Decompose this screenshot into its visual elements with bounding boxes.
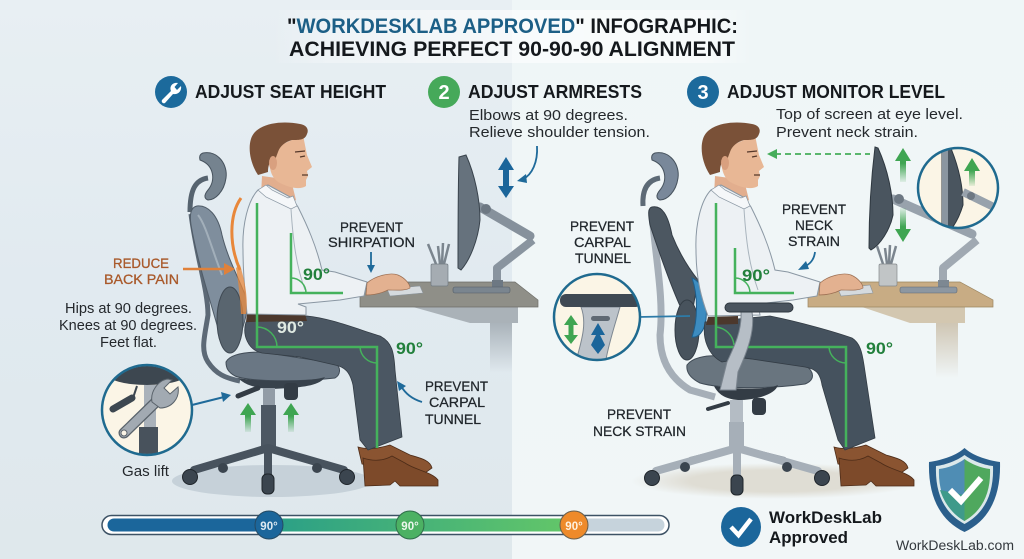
callout: prevent carpal tunnel: TUNNEL [425, 411, 481, 427]
right angle labels: 90° [866, 339, 893, 358]
callout: prevent shirpation [328, 219, 415, 273]
label: gas lift: Gas lift [122, 464, 169, 480]
right angle labels: 90° [742, 266, 770, 285]
progress bar with 90 degree markers [102, 511, 669, 539]
icon: number 3 badge [687, 76, 719, 108]
step 2 heading [428, 76, 650, 141]
callout: prevent shirpation: SHIRPATION [328, 234, 415, 250]
text: hips and knees: Feet flat. [100, 335, 157, 351]
arrow: armrests note [517, 146, 537, 183]
text: hips and knees: Knees at 90 degrees. [59, 318, 197, 334]
marker: blue: 90° [260, 521, 278, 533]
callout: prevent neck strain (monitor): NECK [795, 217, 834, 233]
marker: green: 90° [401, 521, 419, 533]
callout: prevent carpal tunnel: CARPAL [429, 394, 485, 410]
inset: monitor zoom [918, 146, 1000, 236]
marker: orange [560, 511, 588, 539]
callout: reduce back pain: BACK PAIN [104, 271, 179, 287]
icon: check circle [721, 507, 761, 547]
icon: wrench badge [155, 76, 187, 108]
right desk with monitor [808, 147, 993, 378]
step 3 heading: Top of screen at eye level. [776, 106, 963, 123]
icon: shield with check [929, 448, 1000, 532]
callout: prevent carpal tunnel (right): CARPAL [574, 234, 631, 250]
step 1 heading: ADJUST SEAT HEIGHT [195, 82, 386, 102]
callout: prevent shirpation: PREVENT [340, 219, 403, 235]
title: ACHIEVING PERFECT 90-90-90 ALIGNMENT [289, 37, 735, 61]
icon: number 3 badge: 3 [697, 82, 709, 104]
left angle labels [277, 265, 423, 358]
arrow: inset to lever [192, 392, 231, 405]
title: "WORKDESKLAB APPROVED" INFOGRAPHIC: [287, 14, 738, 38]
callout: prevent carpal tunnel (right): TUNNEL [575, 250, 631, 266]
left chair [172, 153, 372, 497]
step 3 heading [687, 76, 963, 141]
inset: wrench on gas lift [102, 363, 192, 457]
website label: WorkDeskLab.com [896, 538, 1014, 553]
step 3 heading: ADJUST MONITOR LEVEL [727, 82, 945, 102]
back pain highlight [232, 198, 247, 314]
callout: prevent neck strain (base): NECK STRAIN [593, 423, 686, 439]
right man [696, 123, 914, 486]
step 2 heading: Relieve shoulder tension. [469, 124, 650, 141]
left angle labels: 90° [396, 339, 423, 358]
icon: green up arrows under seat [240, 403, 299, 432]
left angle labels: 90° [303, 265, 330, 284]
callout: prevent neck strain (base) [593, 406, 686, 439]
left angle labels: 90° [277, 318, 304, 337]
callout: prevent carpal tunnel [397, 378, 488, 427]
callout: prevent neck strain (base): PREVENT [607, 406, 671, 422]
left desk with monitor [360, 155, 538, 373]
callout: prevent carpal tunnel (right): PREVENT [570, 218, 634, 234]
callout: prevent neck strain (monitor): PREVENT [782, 201, 846, 217]
right chair [631, 153, 921, 499]
icon: number 2 badge: 2 [438, 82, 450, 104]
approved badge [721, 507, 882, 547]
approved badge: Approved [769, 529, 848, 547]
left green angle lines [257, 203, 377, 448]
step 3 heading: Prevent neck strain. [776, 124, 918, 141]
text: hips and knees: Hips at 90 degrees. [65, 301, 192, 317]
callout: prevent carpal tunnel (right) [570, 218, 634, 266]
icon: blue double arrow [498, 157, 514, 198]
arrow: dashed eye-level line [767, 149, 870, 159]
icon: green monitor height arrows [895, 148, 911, 242]
marker: blue [255, 511, 283, 539]
right angle labels [742, 266, 893, 358]
callout: reduce back pain [104, 255, 235, 287]
right green angle lines [716, 203, 846, 447]
icon: number 2 badge [428, 76, 460, 108]
text: hips and knees [59, 301, 197, 351]
callout: prevent carpal tunnel: PREVENT [425, 378, 488, 394]
approved badge: WorkDeskLab [769, 509, 882, 527]
step 1 heading [155, 76, 386, 108]
callout: prevent neck strain (monitor): STRAIN [788, 233, 840, 249]
left man [243, 123, 438, 486]
inset: armrest adjustment [554, 274, 690, 365]
callout: prevent neck strain (monitor) [782, 201, 846, 270]
marker: orange: 90° [565, 521, 583, 533]
callout: reduce back pain: REDUCE [113, 255, 169, 271]
step 2 heading: ADJUST ARMRESTS [468, 82, 642, 102]
marker: green [396, 511, 424, 539]
title [287, 14, 738, 61]
right armrest [720, 303, 793, 390]
step 2 heading: Elbows at 90 degrees. [469, 107, 628, 124]
